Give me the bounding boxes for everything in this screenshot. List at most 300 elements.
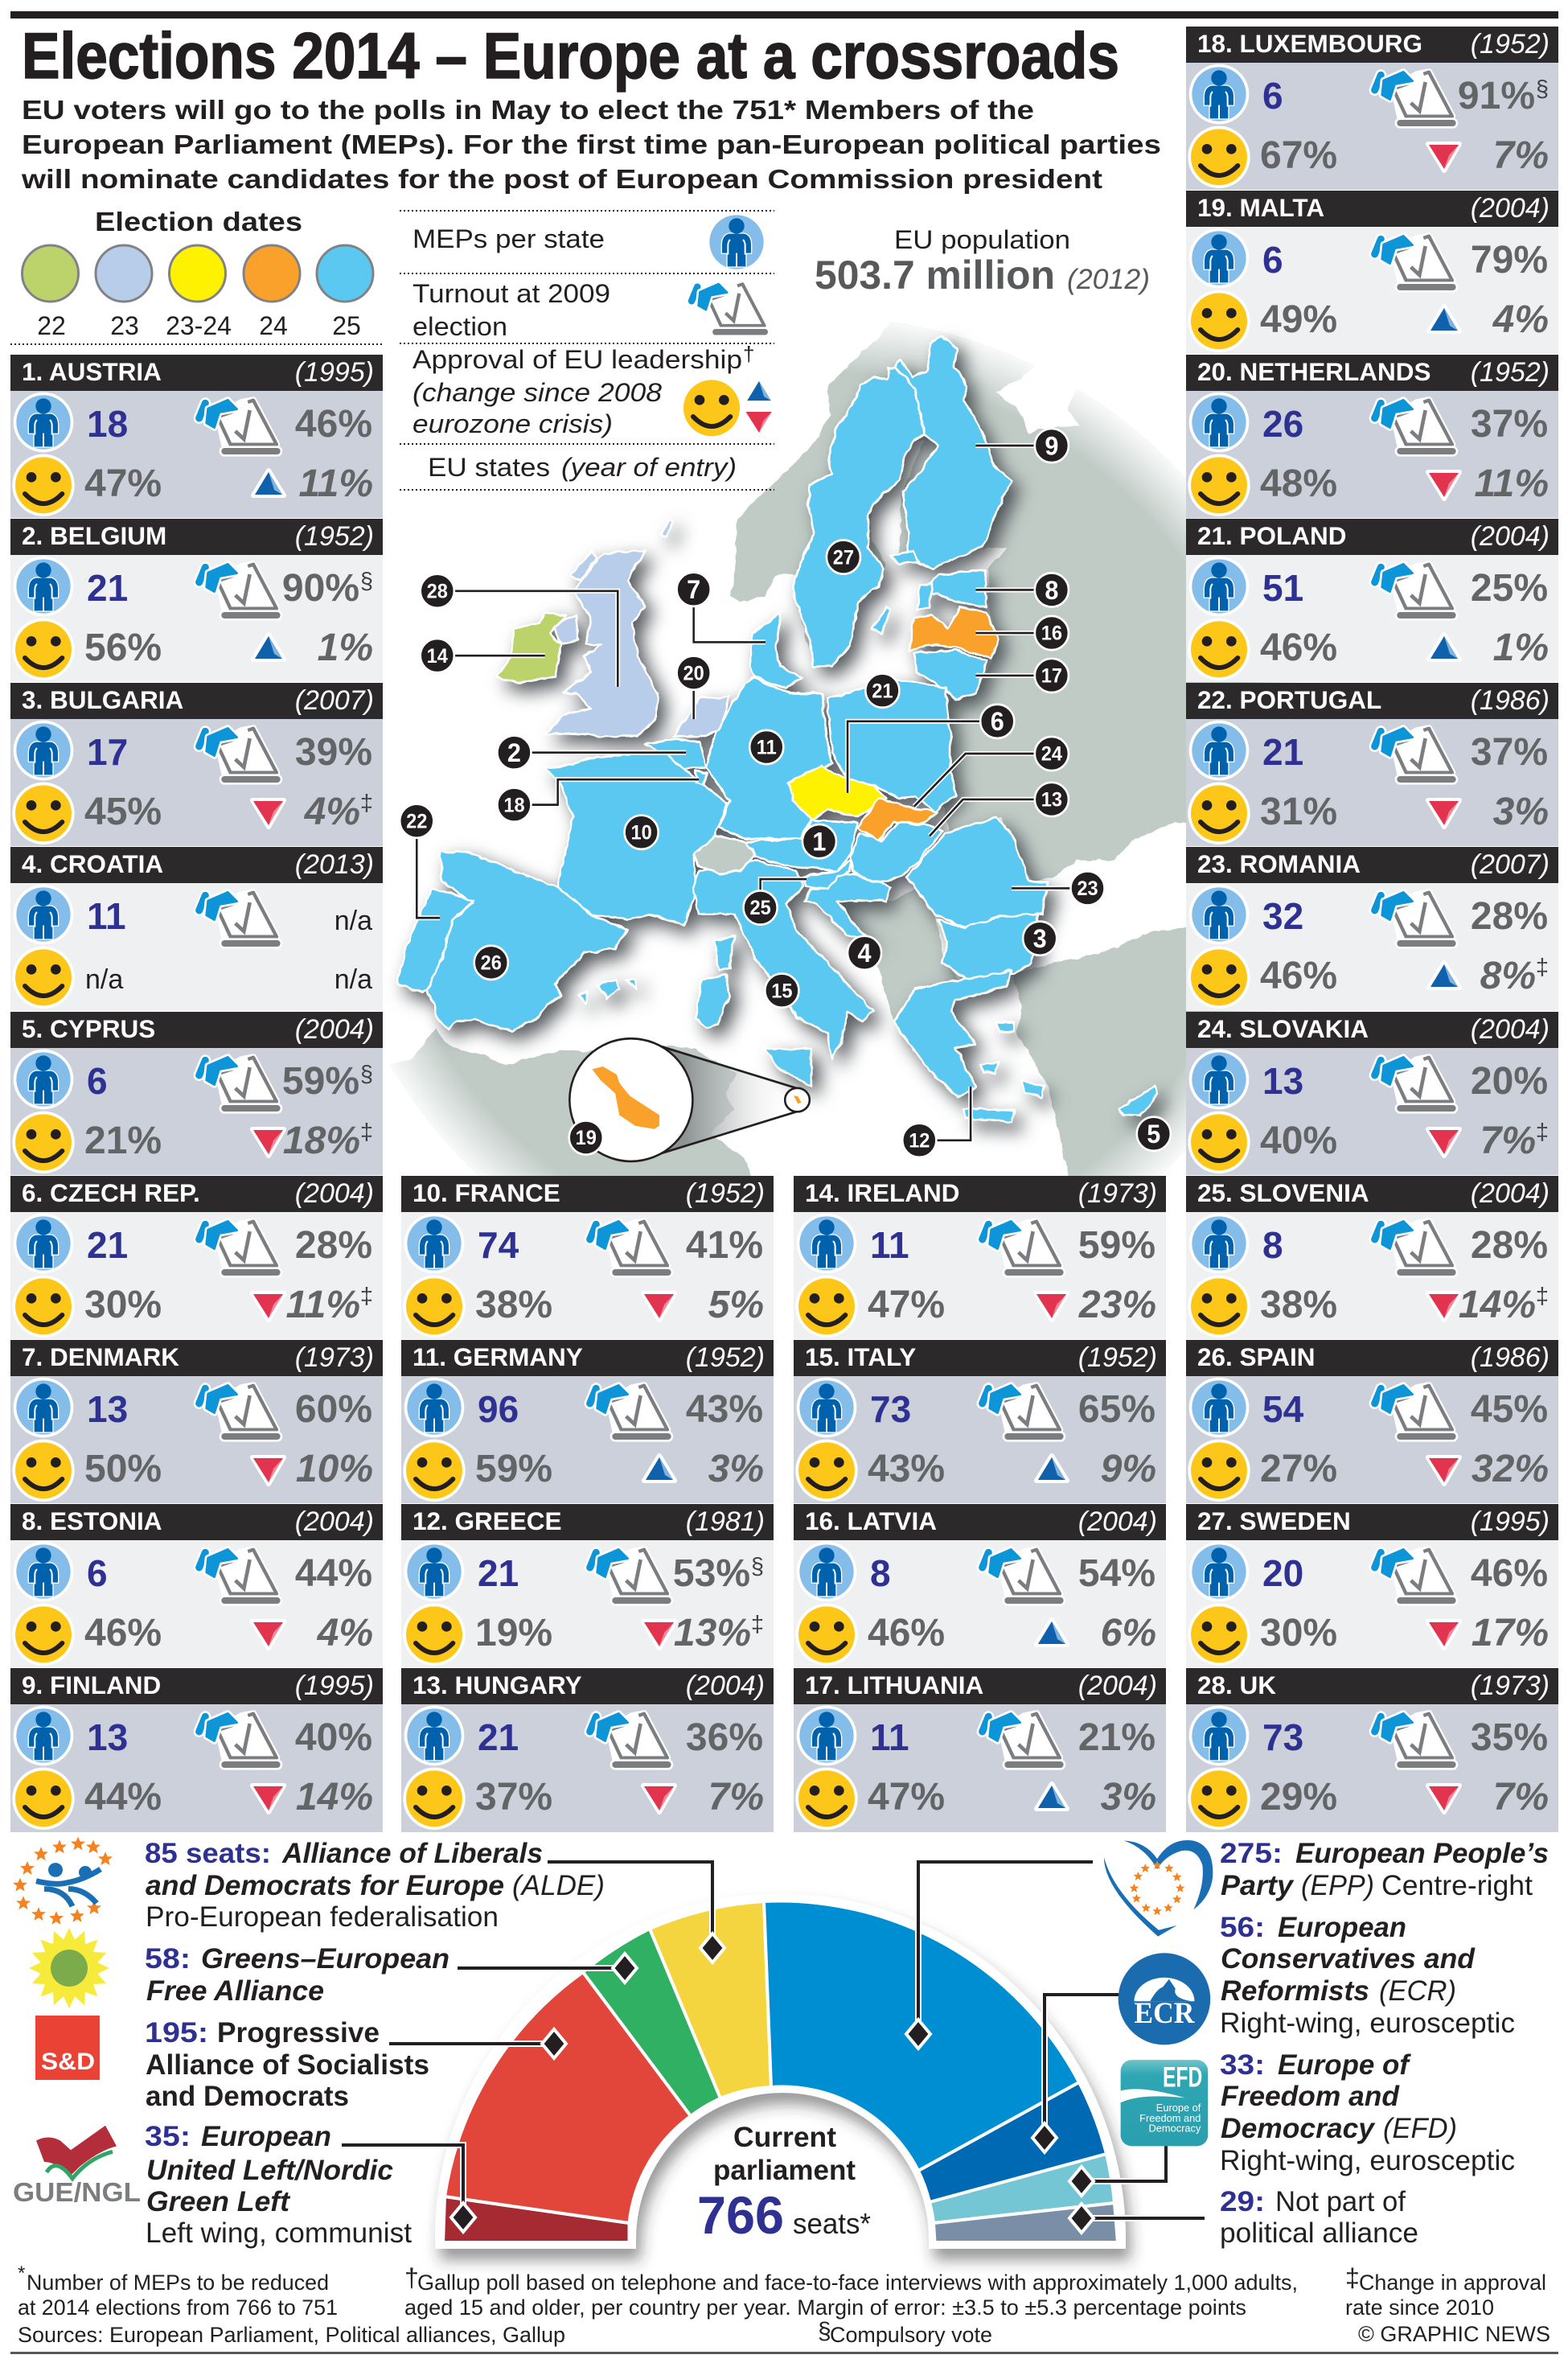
header [1186, 27, 1558, 63]
MEPs [1189, 1706, 1303, 1765]
header: (2013) [295, 849, 374, 880]
header: (1952) [1078, 1342, 1157, 1373]
approval [1188, 618, 1337, 680]
marker 4 [848, 936, 881, 970]
marker 22: 22 [406, 811, 427, 833]
MEPs [1189, 392, 1303, 452]
header: (1952) [1471, 29, 1550, 60]
MEPs: 6 [1262, 75, 1283, 117]
marker 17 [975, 659, 1069, 692]
logo: ECR: ECR [1134, 1997, 1195, 2030]
panel: 17. Lithuania [794, 1668, 1166, 1832]
approval change: 23% [1078, 1284, 1156, 1326]
turnout: § [1536, 76, 1549, 102]
marker 27: 27 [833, 547, 854, 569]
turnout: 59% [282, 1060, 359, 1103]
marker 13 [930, 783, 1069, 836]
approval change [1429, 955, 1549, 997]
approval [1188, 1440, 1337, 1502]
marker 12 [902, 1087, 971, 1157]
EPP label: 275: [1220, 1838, 1283, 1869]
panel: 4. Croatia [10, 847, 383, 1011]
approval change [1428, 1284, 1549, 1326]
logo: EFD: EFD [1163, 2061, 1202, 2094]
key to symbols [400, 211, 774, 490]
approval: 47% [868, 1776, 945, 1818]
marker 17: 17 [1041, 665, 1062, 688]
header: 20. NETHERLANDS [1197, 357, 1431, 386]
turnout: 25% [1471, 567, 1548, 610]
title: Elections 2014 – Europe at a crossroads [22, 20, 1119, 92]
approval change [1428, 462, 1549, 505]
marker 11 [749, 730, 783, 764]
GUE/NGL label: 35: [145, 2121, 191, 2152]
turnout: 39% [295, 731, 372, 774]
MEPs: 21 [87, 567, 128, 609]
EPP label: (EPP) [1301, 1870, 1374, 1901]
approval: 46% [868, 1612, 945, 1654]
panel: 18. Luxembourg [1186, 27, 1558, 190]
logo: S&amp;D [35, 2016, 100, 2080]
turnout [590, 1385, 763, 1440]
header: 3. BULGARIA [22, 685, 183, 714]
marker 25 [744, 879, 807, 925]
map of Europe [391, 322, 1299, 1176]
marker 1: 1 [812, 828, 826, 857]
MEPs [1189, 228, 1283, 288]
panel: 22. Portugal [1186, 683, 1558, 846]
panel: 1. Austria [10, 355, 383, 518]
marker 8 [975, 573, 1069, 607]
approval: 37% [475, 1776, 552, 1818]
header: 12. GREECE [413, 1506, 562, 1535]
panel: 28. UK [1186, 1668, 1558, 1832]
EFD label: 33: [1220, 2049, 1265, 2081]
logo: ALDE [13, 1837, 113, 1925]
turnout [199, 564, 373, 619]
header: (2007) [1471, 849, 1550, 880]
marker 27 [827, 540, 860, 574]
GUE/NGL label [145, 2121, 412, 2249]
header: 16. LATVIA [805, 1506, 937, 1535]
approval change: 18% [283, 1120, 360, 1162]
marker 21: 21 [872, 680, 893, 703]
turnout: 46% [1471, 1552, 1548, 1595]
approval [12, 1276, 162, 1338]
header: 21. POLAND [1197, 521, 1347, 550]
marker 19 [569, 1120, 603, 1155]
header: (2004) [1471, 193, 1550, 224]
turnout: 65% [1078, 1388, 1155, 1431]
turnout: 21% [1078, 1716, 1155, 1759]
marker 5: 5 [1147, 1120, 1160, 1149]
approval change: ‡ [1536, 1284, 1549, 1309]
header: (2004) [686, 1671, 765, 1701]
approval: 49% [1260, 298, 1337, 341]
MEPs [14, 885, 126, 944]
turnout: 28% [1471, 1224, 1548, 1267]
MEPs [14, 721, 128, 780]
marker 18: 18 [503, 795, 525, 816]
marker 24: 24 [1041, 743, 1063, 766]
marker 2: 2 [507, 738, 521, 767]
election dates legend: 25 [332, 311, 361, 340]
approval [12, 1112, 162, 1173]
header: 24. SLOVAKIA [1197, 1014, 1369, 1043]
MEPs [14, 1378, 128, 1437]
header [10, 519, 383, 555]
S&amp;D label: Progressive [217, 2017, 380, 2049]
header: 27. SWEDEN [1197, 1506, 1351, 1535]
approval change: 4% [1492, 298, 1549, 341]
approval: 30% [1260, 1612, 1337, 1654]
approval change: 4% [304, 791, 360, 833]
ECR label: Right-wing, eurosceptic [1220, 2008, 1515, 2039]
MEPs [404, 1706, 519, 1765]
approval change: 7% [1480, 1120, 1536, 1162]
approval change [253, 627, 373, 669]
header [10, 1012, 383, 1048]
approval [12, 1440, 162, 1502]
MEPs: 11 [87, 895, 126, 937]
callout: ALDE [548, 1862, 724, 1962]
callout: GUE/NGL [342, 2145, 475, 2232]
approval: n/a [85, 964, 123, 995]
turnout [590, 1713, 763, 1769]
marker 9 [975, 429, 1069, 462]
panel: 8. Estonia [10, 1504, 383, 1667]
approval change: 4% [317, 1612, 373, 1654]
approval [1188, 290, 1337, 352]
turnout: 90% [282, 567, 359, 610]
header [794, 1340, 1166, 1376]
approval: 45% [84, 791, 162, 833]
panel: 16. Latvia [794, 1504, 1166, 1667]
header [10, 355, 383, 391]
panel: 7. Denmark [10, 1340, 383, 1503]
marker 15: 15 [771, 980, 793, 1002]
MEPs [404, 1542, 519, 1601]
approval change [1428, 1612, 1549, 1654]
header: (1973) [1078, 1178, 1157, 1209]
footnotes: Gallup poll based on telephone and face-to-face interviews with approximately 1,000 adults, [417, 2271, 1298, 2295]
turnout [983, 1549, 1155, 1605]
EFD label: Europe of [1278, 2049, 1411, 2081]
approval [1188, 1276, 1337, 1338]
footnotes: aged 15 and older, per country per year. Margin of error: ±3.5 to ±5.3 percentage points [404, 2295, 1246, 2320]
footnotes: Change in approval [1359, 2271, 1546, 2295]
approval: 31% [1260, 791, 1337, 833]
logo: GUE/NGL: GUE/NGL [13, 2177, 141, 2208]
header: (2004) [1471, 1014, 1550, 1045]
approval change: 13% [674, 1612, 751, 1654]
MEPs [404, 1214, 519, 1273]
marker 19: 19 [576, 1128, 597, 1149]
ECR label: European [1278, 1912, 1406, 1943]
current parliament total: seats* [793, 2207, 871, 2240]
Greens label [145, 1943, 449, 2007]
footnotes: ‡ [1345, 2263, 1360, 2292]
approval [1188, 1112, 1337, 1173]
approval change: 5% [708, 1284, 764, 1326]
header: 11. GERMANY [413, 1342, 583, 1371]
header: (2004) [1078, 1506, 1157, 1537]
approval: 46% [1260, 955, 1337, 997]
MEPs [1189, 1050, 1303, 1109]
election dates legend: 22 [37, 311, 66, 340]
turnout [983, 1385, 1155, 1440]
EFD label [1220, 2049, 1515, 2176]
approval: 56% [84, 627, 162, 669]
Greens label: Free Alliance [146, 1975, 324, 2007]
header: (2004) [295, 1014, 374, 1045]
MEPs: 11 [870, 1224, 909, 1266]
logo: Greens sunflower [29, 1928, 109, 2008]
header: (2004) [295, 1506, 374, 1537]
approval change: 7% [1493, 134, 1549, 177]
approval change: 17% [1472, 1612, 1549, 1654]
approval change [252, 791, 373, 833]
panel: 13. Hungary [401, 1668, 774, 1832]
header: 13. HUNGARY [413, 1671, 582, 1699]
panel: 27. Sweden [1186, 1504, 1558, 1667]
header: (2004) [1078, 1671, 1157, 1701]
turnout [199, 1057, 373, 1112]
turnout: 28% [1471, 895, 1548, 938]
turnout: 45% [1471, 1388, 1548, 1431]
header: (1995) [295, 1671, 374, 1701]
callout: EPP [906, 1862, 1093, 2049]
ALDE label: 85 seats: [145, 1838, 271, 1869]
panel: 26. Spain [1186, 1340, 1558, 1503]
header [10, 1668, 383, 1704]
approval [12, 454, 162, 516]
turnout: 40% [295, 1716, 372, 1759]
header: (1986) [1471, 685, 1550, 716]
approval: 48% [1260, 462, 1337, 505]
turnout [199, 892, 372, 947]
approval change [643, 1776, 764, 1818]
approval change [1428, 134, 1549, 177]
MEPs: 18 [87, 403, 128, 445]
approval: 43% [868, 1448, 945, 1490]
header: (2007) [295, 685, 374, 716]
approval [1188, 947, 1337, 1009]
approval: 50% [84, 1448, 162, 1490]
header: (1952) [686, 1178, 765, 1209]
approval [1188, 1604, 1337, 1666]
header: (1986) [1471, 1342, 1550, 1373]
header [794, 1176, 1166, 1212]
turnout [199, 400, 372, 455]
MEPs [797, 1542, 891, 1601]
MEPs: 13 [87, 1388, 128, 1430]
GUE/NGL label: Green Left [146, 2186, 290, 2217]
ECR label: (ECR) [1379, 1975, 1456, 2007]
MEPs [14, 1214, 128, 1273]
marker 6: 6 [991, 708, 1004, 736]
MEPs: 21 [478, 1552, 519, 1594]
marker 20: 20 [683, 663, 704, 684]
MEPs: 6 [87, 1060, 108, 1102]
marker 15 [765, 974, 798, 1008]
turnout [199, 1385, 372, 1440]
header [1186, 1176, 1558, 1212]
S&amp;D label: Alliance of Socialists [146, 2049, 429, 2081]
MEPs: 13 [1262, 1060, 1303, 1102]
land background [391, 322, 1299, 1176]
approval: 40% [1260, 1120, 1337, 1162]
turnout: 60% [295, 1388, 372, 1431]
header: 19. MALTA [1197, 193, 1324, 222]
approval [403, 1440, 552, 1502]
non-aligned label [1220, 2186, 1418, 2249]
turnout [983, 1713, 1155, 1769]
approval change [643, 1612, 764, 1654]
header: 26. SPAIN [1197, 1342, 1315, 1371]
approval change [252, 1776, 373, 1818]
logo: EFD: Democracy [1149, 2123, 1201, 2135]
header: 25. SLOVENIA [1197, 1178, 1369, 1207]
approval change [253, 462, 373, 505]
header [1186, 355, 1558, 391]
turnout [199, 728, 372, 783]
footnotes [18, 2262, 1550, 2347]
approval [403, 1276, 552, 1338]
header [10, 683, 383, 719]
marker 10: 10 [631, 822, 652, 845]
logo: EPP heart [1104, 1840, 1213, 1937]
MEPs: 17 [87, 731, 128, 773]
header [401, 1504, 774, 1540]
header: 14. IRELAND [805, 1178, 960, 1207]
ECR label: Reformists [1221, 1975, 1369, 2007]
panel: 10. France [401, 1176, 774, 1339]
approval change [1429, 298, 1549, 341]
footnotes: © GRAPHIC NEWS [1358, 2322, 1550, 2346]
footnotes: Sources: European Parliament, Political alliances, Gallup [18, 2323, 565, 2347]
marker 6 [848, 705, 1014, 793]
MEPs: 21 [478, 1716, 519, 1758]
approval: 47% [868, 1284, 945, 1326]
header [1186, 1668, 1558, 1704]
approval change: 7% [708, 1776, 764, 1818]
header: 2. BELGIUM [22, 521, 166, 550]
header [794, 1668, 1166, 1704]
marker 3: 3 [1033, 924, 1047, 953]
MEPs [404, 1378, 519, 1437]
turnout [199, 1221, 372, 1276]
Malta inset [569, 1038, 810, 1161]
approval: 27% [1260, 1448, 1337, 1490]
intro text [21, 96, 1161, 195]
panel: 5. Cyprus [10, 1012, 383, 1175]
header: 6. CZECH REP. [22, 1178, 200, 1207]
panel: 19. Malta [1186, 191, 1558, 354]
turnout: 91% [1458, 75, 1535, 117]
marker 20 [677, 655, 711, 719]
header: (1952) [295, 521, 374, 552]
turnout [983, 1221, 1155, 1276]
marker 9: 9 [1045, 432, 1058, 461]
marker 16: 16 [1041, 623, 1062, 645]
EFD label: Democracy [1221, 2113, 1376, 2144]
GUE/NGL label: European [201, 2121, 331, 2152]
logo: S&amp;D: S&D [41, 2049, 95, 2075]
approval change: ‡ [1536, 1120, 1549, 1145]
marker 4: 4 [858, 939, 872, 968]
marker 11: 11 [757, 737, 777, 759]
turnout [1375, 1549, 1548, 1605]
EU population: (2012) [1067, 264, 1150, 295]
non-aligned label: political alliance [1220, 2217, 1418, 2249]
approval change: 14% [296, 1776, 373, 1818]
header: (2004) [1471, 1178, 1550, 1209]
approval change: 10% [296, 1448, 373, 1490]
ALDE label: Alliance of Liberals [281, 1838, 543, 1869]
MEPs [14, 392, 128, 452]
marker 25: 25 [749, 898, 771, 919]
turnout [1375, 1057, 1548, 1112]
turnout: § [751, 1554, 764, 1580]
turnout: 41% [686, 1224, 763, 1267]
header: 4. CROATIA [22, 849, 163, 878]
approval change: 7% [1493, 1776, 1549, 1818]
approval [12, 783, 162, 845]
panel: 11. Germany [401, 1340, 774, 1503]
approval change: ‡ [360, 791, 373, 816]
approval: 46% [84, 1612, 162, 1654]
header: 1. AUSTRIA [22, 357, 162, 386]
election dates legend: 23-24 [166, 311, 232, 340]
approval: 67% [1260, 134, 1337, 177]
panel: 9. Finland [10, 1668, 383, 1832]
non-aligned label: Not part of [1275, 2186, 1406, 2217]
key to symbols: MEPs per state [413, 224, 605, 253]
MEPs: 73 [1262, 1716, 1303, 1758]
intro text: will nominate candidates for the post of European Commission president [21, 165, 1102, 195]
MEPs [1189, 721, 1303, 780]
turnout: 79% [1471, 239, 1548, 282]
approval change: 1% [1493, 627, 1549, 669]
MEPs: 96 [478, 1388, 519, 1430]
intro text: European Parliament (MEPs). For the first time pan-European political parties [22, 130, 1161, 160]
key to symbols: eurozone crisis) [413, 409, 613, 438]
header: 17. LITHUANIA [805, 1671, 983, 1699]
footnotes: § [818, 2318, 831, 2345]
Greens label: Greens–European [201, 1943, 449, 1975]
key to symbols: (change since 2008 [413, 378, 662, 407]
header [1186, 1340, 1558, 1376]
approval: 30% [84, 1284, 162, 1326]
MEPs [1189, 885, 1303, 944]
MEPs [1189, 557, 1303, 616]
EFD label: Right-wing, eurosceptic [1220, 2145, 1515, 2176]
MEPs [1189, 1378, 1304, 1437]
callout: S&amp;D [389, 2029, 566, 2058]
approval change [644, 1448, 764, 1490]
header: (1995) [1471, 1506, 1550, 1537]
turnout: 35% [1471, 1716, 1548, 1759]
footnotes: † [404, 2263, 419, 2292]
MEPs [1189, 1214, 1283, 1273]
header [401, 1340, 774, 1376]
header [1186, 1012, 1558, 1048]
S&amp;D label: 195: [145, 2017, 208, 2049]
header [1186, 191, 1558, 227]
election dates legend: 24 [259, 311, 288, 340]
header: 7. DENMARK [22, 1342, 179, 1371]
